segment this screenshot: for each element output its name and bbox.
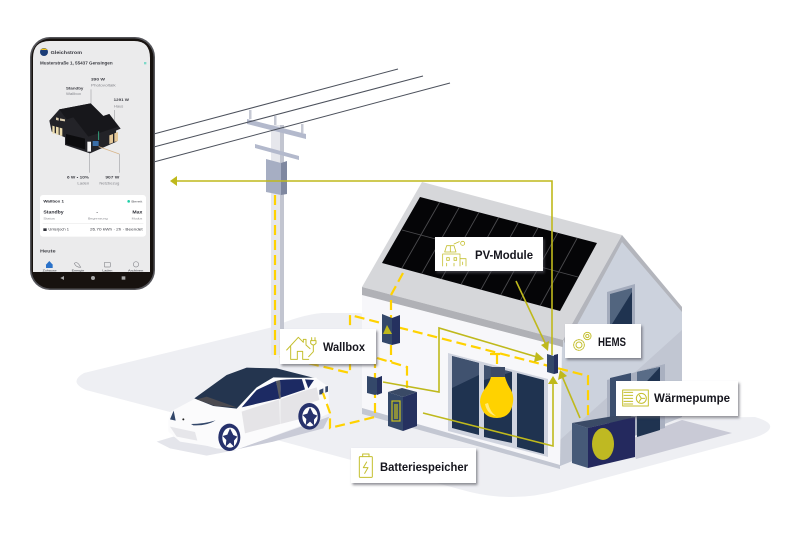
icon: house with plug — [287, 337, 316, 359]
pole shaft — [271, 125, 284, 355]
bottom app navigation: Energie — [72, 268, 85, 272]
front wall — [362, 295, 562, 465]
energy readings: Photovoltaik — [91, 84, 116, 88]
battery unit — [388, 388, 417, 431]
house ground shadow — [628, 420, 732, 459]
car shadow — [157, 437, 237, 456]
arrow: HEMS to smartphone — [170, 176, 552, 355]
icon: heat pump unit — [623, 390, 648, 406]
garage opening — [66, 134, 85, 149]
label: Batteriespeicher — [351, 448, 476, 483]
wallbox card: Begrenzung — [88, 216, 108, 220]
arrow: PV to HEMS — [516, 281, 549, 351]
windshield and roof — [194, 368, 316, 409]
transformer box — [266, 159, 287, 195]
wallbox card: Unterjoch 1 — [48, 228, 69, 232]
arrow: heat pump to HEMS — [558, 370, 580, 418]
rear wheel — [298, 403, 320, 430]
label: Wallbox — [280, 329, 376, 364]
front wheel — [218, 424, 240, 451]
bottom app navigation: Archiven — [128, 268, 144, 272]
bottom app navigation: Laden — [102, 268, 113, 272]
car — [157, 368, 329, 456]
upper side window — [607, 284, 635, 324]
smartphone — [30, 37, 155, 290]
light bulb — [480, 367, 513, 418]
doors — [242, 399, 280, 433]
energy readings — [66, 77, 129, 186]
overhead wires — [150, 69, 450, 163]
app logo and brand — [40, 48, 83, 56]
arrow: battery to HEMS — [423, 376, 558, 446]
section heading: Heute — [40, 248, 56, 254]
label: HEMS — [565, 324, 641, 358]
wallbox card: Bereit — [131, 200, 143, 204]
lower side windows — [607, 364, 665, 444]
arrow: inverter to HEMS — [383, 328, 544, 392]
energy readings: 1291 W — [114, 97, 129, 102]
wallbox card: Status — [43, 216, 56, 220]
yellow dashed power wiring — [275, 195, 588, 428]
wallbox card: Wallbox 1 — [43, 200, 64, 204]
label: HEMS: HEMS — [598, 337, 626, 349]
address: Musterstraße 1, 55437 Gensingen — [40, 61, 113, 66]
bottom app navigation — [43, 261, 144, 272]
bottom app navigation: Zuhause — [43, 268, 57, 272]
heat pump — [572, 415, 635, 468]
energy readings: 907 W — [105, 175, 120, 180]
front windows — [448, 353, 548, 457]
energy readings: 6 W • 10% — [67, 175, 90, 180]
wallbox card: Max — [132, 210, 143, 215]
app logo and brand: Gleichstrom — [51, 50, 83, 56]
label: Wärmepumpe — [616, 381, 738, 416]
wallbox card: Modus — [132, 216, 143, 220]
charge port — [319, 386, 328, 395]
inverter box — [367, 376, 382, 395]
leader lines — [89, 89, 119, 173]
energy readings: Haus — [114, 104, 124, 108]
wallbox card: 26.70 kWh · 2h · Beendet — [90, 228, 143, 232]
icon: battery — [359, 454, 372, 477]
app screen content — [40, 48, 146, 280]
energy readings: Wallbox — [66, 92, 81, 96]
energy readings: Standby — [66, 85, 84, 90]
car body — [168, 368, 329, 448]
phone system navigation bar — [60, 276, 125, 280]
side windows — [242, 381, 280, 407]
wallbox card — [40, 195, 146, 237]
label: Wärmepumpe: Wärmepumpe — [654, 393, 730, 405]
HEMS unit — [547, 354, 558, 374]
roof — [362, 182, 682, 347]
house — [362, 182, 732, 469]
lit windows — [52, 126, 62, 136]
breaker box — [382, 314, 400, 345]
power pole with lines — [150, 69, 450, 355]
wallbox card: - — [96, 209, 98, 214]
olive data flow arrows — [170, 176, 580, 446]
address — [40, 61, 146, 66]
side wall — [560, 240, 682, 466]
icon: solar house — [443, 241, 466, 266]
energy readings: Laden — [77, 182, 90, 186]
energy readings: 390 W — [91, 77, 105, 82]
label: Batteriespeicher: Batteriespeicher — [380, 462, 469, 474]
label: Wallbox: Wallbox — [323, 342, 366, 354]
solar panels — [382, 197, 597, 311]
phone screen — [33, 41, 150, 272]
mini house — [49, 103, 121, 154]
ground plane — [76, 313, 770, 497]
label: PV-Module: PV-Module — [475, 250, 533, 262]
label: PV-Module — [435, 237, 543, 271]
phone body — [30, 37, 155, 290]
icon: gears — [574, 332, 591, 350]
roof and walls silhouette — [49, 103, 121, 153]
insulators and crossarms — [247, 110, 306, 160]
energy readings: Netzbezug — [99, 182, 120, 186]
wallbox card: Standby — [43, 210, 64, 215]
headlights and grille — [170, 411, 176, 421]
